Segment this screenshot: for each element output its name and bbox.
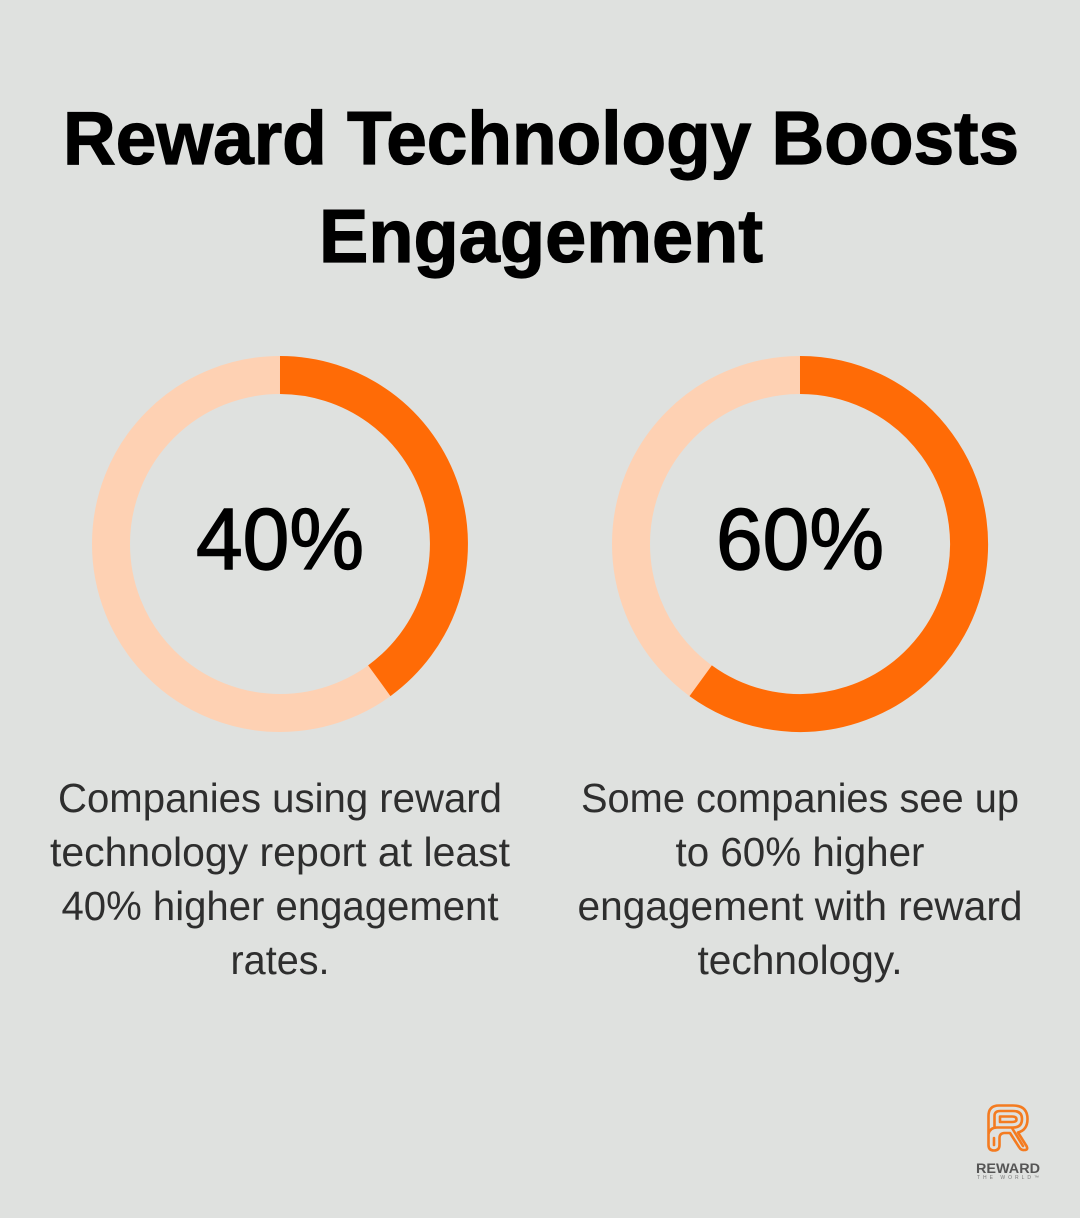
title: Engagement	[319, 194, 763, 278]
description: 60%: to 60% higher	[676, 829, 924, 875]
description: 40%: rates.	[230, 937, 330, 983]
icon: R mark	[988, 1106, 1028, 1150]
value: 40%: 40%	[196, 491, 364, 588]
panel: 40% statistic	[50, 375, 511, 983]
wordmark: REWARD	[976, 1161, 1040, 1176]
title: Reward Technology Boosts	[63, 96, 1019, 180]
tagline: THE WORLD™	[977, 1175, 1039, 1181]
panel: 60% statistic	[578, 375, 1022, 983]
description: 40%	[50, 775, 511, 983]
description: 60%: engagement with reward	[578, 883, 1022, 929]
donut chart: 60%	[631, 375, 969, 713]
description: 40%: Companies using reward	[58, 775, 502, 821]
description: 60%	[578, 775, 1022, 983]
title	[63, 96, 1019, 278]
description: 40%: 40% higher engagement	[62, 883, 499, 929]
description: 60%: technology.	[698, 937, 902, 983]
description: 60%: Some companies see up	[581, 775, 1019, 821]
logo: Reward the World	[976, 1106, 1040, 1181]
value: 60%: 60%	[716, 491, 884, 588]
donut chart: 40%	[111, 375, 449, 713]
description: 40%: technology report at least	[50, 829, 511, 875]
